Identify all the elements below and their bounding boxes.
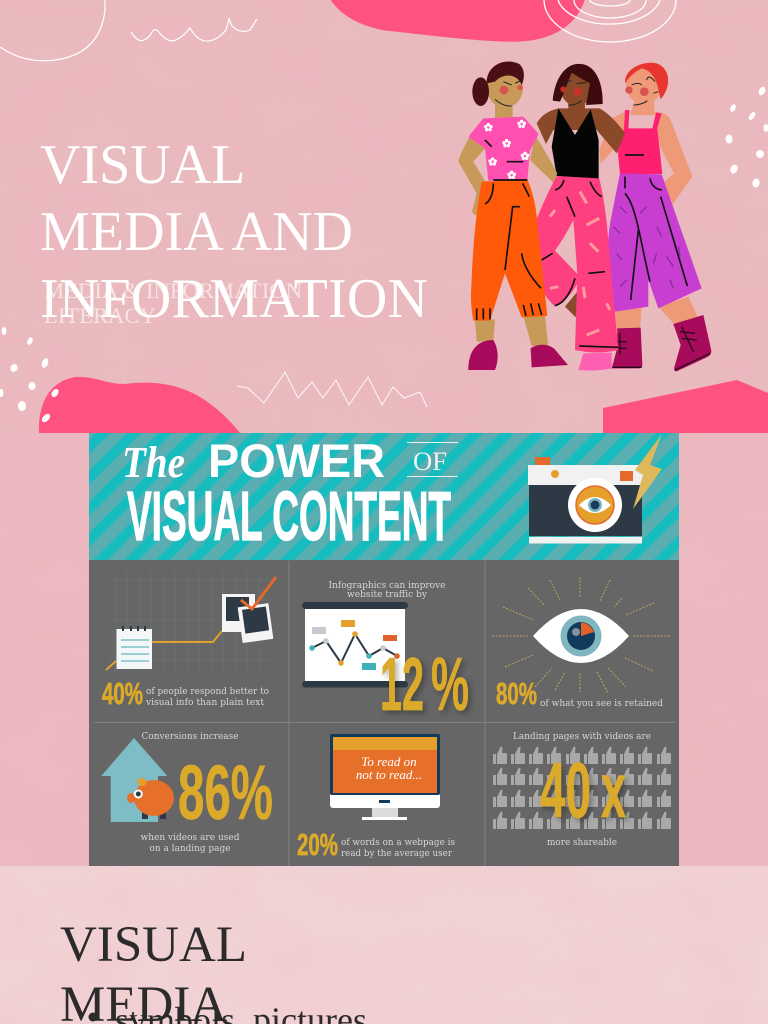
caption: of what you see is retained (540, 698, 663, 709)
illustration: three women (458, 62, 711, 371)
heading: VISUAL CONTENT: VISUAL CONTENT (127, 477, 451, 555)
title: INFORMATION (40, 268, 428, 330)
icon: monitor: To read on (361, 754, 417, 769)
panel: 20 percent (297, 734, 455, 862)
stat: 86%: 86% (178, 750, 273, 836)
icon: eye (533, 609, 629, 663)
concentric arcs (544, 0, 676, 42)
caption: of people respond better to (146, 686, 269, 697)
line chart (106, 631, 222, 670)
white dots: right (726, 86, 768, 188)
caption: visual info than plain text (145, 697, 264, 708)
caption (341, 837, 455, 859)
paper texture: bottom slide (0, 866, 768, 1024)
icon: house (101, 738, 167, 822)
woman: middle (523, 64, 625, 371)
caption (145, 686, 269, 708)
woman: right (599, 63, 711, 371)
panel: 86 percent (101, 731, 273, 854)
heading: visual media: VISUAL (60, 917, 247, 973)
subtitle: LITERACY (44, 303, 156, 328)
stat: 80%: 80% (496, 676, 537, 711)
icon: thumbs up grid (493, 747, 671, 829)
icon: presentation board (302, 602, 408, 688)
heading: visual media (60, 917, 247, 1024)
icon: piggy bank (127, 778, 174, 819)
panel: grey body (89, 559, 679, 866)
caption: read by the average user (341, 848, 452, 859)
panel: 80 percent (492, 577, 670, 711)
caption: website traffic by (347, 589, 428, 600)
background: top slide (0, 0, 768, 433)
heading: POWER: POWER (208, 434, 385, 487)
panel: 40x (493, 731, 671, 848)
stat: 40%: 40% (102, 676, 143, 711)
infographic: the power of visual content (89, 433, 679, 866)
panel: 12 percent (302, 580, 469, 726)
subtitle: MEDIA & INFORMATION (44, 278, 302, 303)
squiggle: top (131, 19, 257, 41)
stat: 40x: 40 (540, 746, 591, 834)
caption: of words on a webpage is (341, 837, 455, 848)
stat: 20%: 20% (297, 827, 338, 862)
title: VISUAL (40, 134, 245, 196)
zigzag line (237, 372, 427, 407)
stat: 40x: x (601, 746, 626, 834)
pink shape: bottom right (603, 380, 768, 433)
icon: eye rays (492, 577, 670, 693)
chart grid (107, 570, 272, 672)
dividers (94, 561, 675, 866)
icon: notepad (116, 626, 152, 669)
stat: 12%: % (431, 642, 469, 726)
caption: on a landing page (150, 843, 231, 854)
icon: photos (222, 577, 276, 643)
heading: The: The (122, 438, 185, 487)
heading: OF: OF (413, 447, 447, 476)
pink blob: bottom left (39, 377, 240, 433)
heading: OF (407, 442, 458, 476)
panel: header banner (89, 433, 679, 560)
icon: camera (528, 434, 662, 544)
caption: more shareable (547, 837, 617, 848)
caption: Conversions increase (142, 731, 239, 742)
white dots: left (0, 327, 60, 424)
subtitle (44, 278, 302, 328)
title: MEDIA AND (40, 201, 353, 263)
caption: Infographics can improve (328, 580, 446, 591)
background: bottom slide (0, 866, 768, 1024)
panel: 40 percent (102, 570, 276, 711)
caption (328, 580, 446, 600)
background: middle slide (0, 433, 768, 866)
stat: 12%: 12 (380, 642, 424, 726)
panel: top slide decorations (0, 0, 768, 433)
pink blob: top (330, 0, 585, 42)
title (40, 134, 428, 330)
icon: monitor: not to read... (356, 767, 422, 782)
icon: monitor (330, 734, 440, 820)
caption: when videos are used (140, 832, 240, 843)
woman: left (458, 62, 568, 370)
caption (140, 832, 240, 854)
caption: Landing pages with videos are (513, 731, 651, 742)
arc: top left (0, 0, 105, 61)
